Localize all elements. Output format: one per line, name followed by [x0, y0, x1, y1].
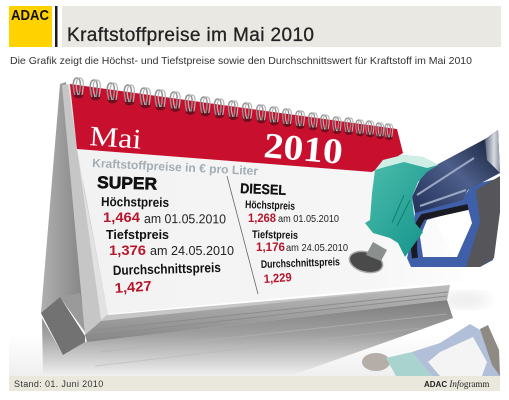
- nozzle spout: [347, 248, 385, 276]
- footer bar: [9, 376, 500, 391]
- panel: diesel: 1,176: [256, 240, 285, 254]
- panel: diesel: am 01.05.2010: [278, 213, 339, 225]
- title banner: Kraftstoffpreise im Mai 2010: [67, 25, 314, 46]
- stand reflection: [41, 297, 85, 355]
- page stack: [62, 84, 450, 342]
- panel: diesel: 1,268: [248, 211, 276, 225]
- stand fold: [41, 297, 85, 354]
- panel: super: am 01.05.2010: [144, 211, 226, 226]
- icon: fuel nozzle: [347, 130, 500, 276]
- calendar back stand: [41, 82, 88, 335]
- date note: Stand: 01. Juni 2010: [14, 379, 104, 389]
- panel: diesel: 1,229: [263, 270, 292, 286]
- soft shadow at right: [440, 292, 490, 308]
- spiral binding: [73, 78, 393, 140]
- panel: diesel: am 24.05.2010: [286, 242, 348, 254]
- panel: diesel: Höchstpreis: [245, 199, 295, 213]
- panel: super: 1,376: [109, 242, 146, 258]
- calendar base: [85, 285, 450, 342]
- month: Mai: [89, 121, 143, 156]
- base reflection: [42, 300, 453, 376]
- lever: [414, 207, 468, 258]
- panel: diesel: [240, 180, 348, 286]
- nozzle reflection: [362, 324, 500, 376]
- header divider bar: [55, 6, 58, 47]
- teal body: [365, 155, 438, 257]
- white page: [77, 149, 465, 314]
- red header: [70, 84, 403, 172]
- calendar: [41, 78, 465, 376]
- shadow backdrop: [9, 335, 500, 376]
- panel: super: 1,464: [103, 209, 140, 225]
- panel: super: [97, 173, 234, 296]
- panel: diesel: DIESEL: [240, 180, 287, 198]
- year: 2010: [262, 125, 344, 172]
- panel: diesel: Durchschnittspreis: [261, 256, 340, 271]
- barrel: [412, 130, 500, 213]
- panel: super: Höchstpreis: [101, 194, 169, 210]
- panel: super: Tiefstpreis: [106, 227, 169, 242]
- column divider: [227, 176, 258, 294]
- panel: super: SUPER: [97, 173, 157, 194]
- chart subtitle: Kraftstoffpreise in € pro Liter: [92, 156, 259, 178]
- stack layer lines: [87, 292, 448, 336]
- reflection layer lines: [95, 314, 447, 366]
- panel: super: 1,427: [114, 277, 152, 296]
- subtitle: Die Grafik zeigt die Höchst- und Tiefstpreise sowie den Durchschnittswert für Kraftstoff im Mai 2010: [10, 55, 472, 67]
- handle guard: [407, 178, 500, 267]
- panel: diesel: Tiefstpreis: [252, 229, 298, 242]
- ADAC logo: [9, 6, 52, 47]
- ADAC logo: ADAC: [11, 7, 49, 24]
- source credit: ADAC Infogramm: [424, 379, 489, 389]
- title banner: [62, 6, 501, 47]
- panel: super: am 24.05.2010: [150, 243, 234, 258]
- panel: super: Durchschnittspreis: [113, 260, 221, 278]
